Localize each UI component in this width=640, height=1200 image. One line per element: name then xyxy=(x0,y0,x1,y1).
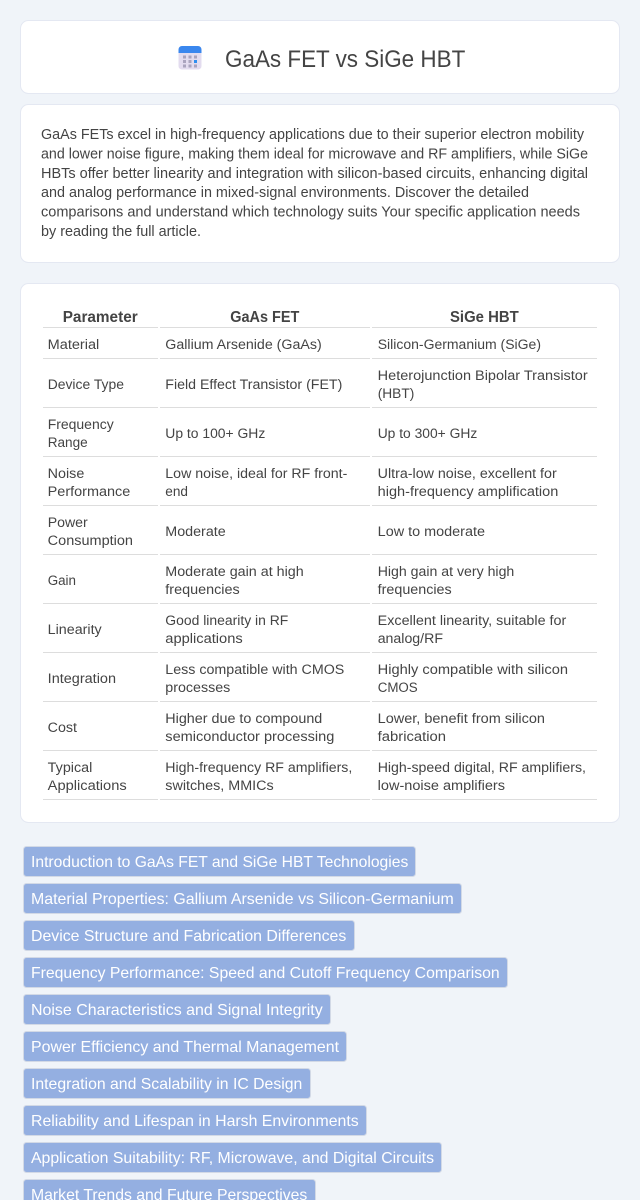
row: power consumption xyxy=(43,515,597,555)
row: integration: processes xyxy=(165,680,230,696)
row: gain: Gain xyxy=(48,573,76,589)
row: device type: Field Effect Transistor (FET) xyxy=(165,377,342,393)
row: gain: Moderate gain at high xyxy=(165,564,304,580)
row: device type: Device Type xyxy=(48,377,124,393)
row: device type: (HBT) xyxy=(378,386,414,402)
row: cost: semiconductor processing xyxy=(165,729,334,745)
row: device type xyxy=(43,368,597,408)
tag: device structure: Device Structure and Fabrication Differences xyxy=(31,928,346,945)
row: noise performance: Low noise, ideal for RF front- xyxy=(165,466,348,482)
text block: summary: comparisons and understand which technology suits Your specific application needs xyxy=(41,205,580,221)
row: typical applications: High-frequency RF amplifiers, xyxy=(165,760,352,776)
row: material: Silicon-Germanium (SiGe) xyxy=(378,337,541,353)
tag: material properties: Material Properties: Gallium Arsenide vs Silicon-Germanium xyxy=(31,891,454,908)
tag: application suitability: Application Suitability: RF, Microwave, and Digital Circuits xyxy=(31,1150,434,1167)
row: power consumption: Moderate xyxy=(165,524,226,540)
tag list: article sections xyxy=(24,846,508,1200)
row: typical applications xyxy=(43,760,597,800)
row: typical applications: Typical xyxy=(48,760,92,776)
table header row xyxy=(43,309,597,328)
row: cost: Higher due to compound xyxy=(165,711,322,727)
tag: integration and scalability: Integration and Scalability in IC Design xyxy=(31,1076,302,1093)
row: material: Material xyxy=(48,337,99,353)
row: noise performance: Noise xyxy=(48,466,84,482)
row: noise performance: high-frequency amplification xyxy=(378,484,558,500)
row: linearity xyxy=(43,613,597,653)
text block: summary xyxy=(41,127,588,240)
row: linearity: analog/RF xyxy=(378,631,443,647)
row: power consumption: Power xyxy=(48,515,88,531)
tag: power efficiency: Power Efficiency and Thermal Management xyxy=(31,1039,340,1056)
row: material xyxy=(43,337,597,359)
row: integration: Highly compatible with silicon xyxy=(378,662,568,678)
table header row: GaAs FET xyxy=(230,309,299,326)
row: power consumption: Consumption xyxy=(48,533,133,549)
icon: calendar xyxy=(178,46,202,70)
text block: summary: and analog performance in mixed-signal environments. Discover the detailed xyxy=(41,185,529,201)
tag: market trends xyxy=(24,1180,316,1200)
row: gain: frequencies xyxy=(378,582,452,598)
text block: summary: HBTs offer better linearity and integration with silicon-based circuits, enhancing digital xyxy=(41,166,588,182)
row: cost: fabrication xyxy=(378,729,446,745)
row: frequency range: Up to 300+ GHz xyxy=(378,426,477,442)
tag: application suitability xyxy=(24,1142,442,1172)
tag: introduction: Introduction to GaAs FET and SiGe HBT Technologies xyxy=(31,854,408,871)
row: linearity: Excellent linearity, suitable for xyxy=(378,613,567,629)
row: typical applications: Applications xyxy=(48,778,127,794)
tag: noise characteristics: Noise Characteristics and Signal Integrity xyxy=(31,1002,323,1019)
panel: title card xyxy=(20,20,620,94)
row: gain: High gain at very high xyxy=(378,564,514,580)
panel: description xyxy=(20,104,620,262)
row: linearity: applications xyxy=(165,631,243,647)
tag: frequency performance xyxy=(24,958,508,988)
tag: introduction xyxy=(24,846,416,876)
row: integration: Integration xyxy=(48,671,116,687)
text block: summary: and lower noise figure, making them ideal for microwave and RF amplifiers, while SiGe xyxy=(41,146,588,162)
row: device type: Heterojunction Bipolar Transistor xyxy=(378,368,588,384)
row: gain xyxy=(43,564,597,604)
row: noise performance: Ultra-low noise, excellent for xyxy=(378,466,557,482)
text block: summary: by reading the full article. xyxy=(41,224,201,240)
tag: material properties xyxy=(24,884,462,914)
row: typical applications: switches, MMICs xyxy=(165,778,274,794)
row: material: Gallium Arsenide (GaAs) xyxy=(165,337,322,353)
row: integration: Less compatible with CMOS xyxy=(165,662,344,678)
text block: summary: GaAs FETs excel in high-frequency applications due to their superior electron mobility xyxy=(41,127,585,143)
row: frequency range: Up to 100+ GHz xyxy=(165,426,265,442)
row: noise performance xyxy=(43,466,597,506)
tag: reliability: Reliability and Lifespan in Harsh Environments xyxy=(31,1113,359,1130)
row: cost: Cost xyxy=(48,720,77,736)
row: noise performance: Performance xyxy=(48,484,130,500)
row: noise performance: end xyxy=(165,484,188,500)
tag: integration and scalability xyxy=(24,1068,310,1098)
tag: device structure xyxy=(24,920,354,950)
row: gain: frequencies xyxy=(165,582,240,598)
row: cost xyxy=(43,711,597,751)
row: power consumption: Low to moderate xyxy=(378,524,485,540)
tag: noise characteristics xyxy=(24,994,330,1024)
row: typical applications: High-speed digital, RF amplifiers, xyxy=(378,760,586,776)
title: GaAs FET vs SiGe HBT xyxy=(225,46,466,73)
tag: power efficiency xyxy=(24,1032,346,1062)
row: linearity: Good linearity in RF xyxy=(165,613,289,629)
row: integration xyxy=(43,662,597,702)
row: integration: CMOS xyxy=(378,680,418,696)
tag: frequency performance: Frequency Performance: Speed and Cutoff Frequency Comparison xyxy=(31,965,500,982)
row: frequency range xyxy=(43,417,597,457)
row: frequency range: Frequency xyxy=(48,417,115,433)
tag: reliability xyxy=(24,1106,366,1136)
table header row: SiGe HBT xyxy=(450,309,519,326)
row: linearity: Linearity xyxy=(48,622,103,638)
row: cost: Lower, benefit from silicon xyxy=(378,711,545,727)
table header row: Parameter xyxy=(63,309,138,326)
row: frequency range: Range xyxy=(48,435,88,451)
row: typical applications: low-noise amplifiers xyxy=(378,778,505,794)
panel: comparison table xyxy=(20,284,620,822)
